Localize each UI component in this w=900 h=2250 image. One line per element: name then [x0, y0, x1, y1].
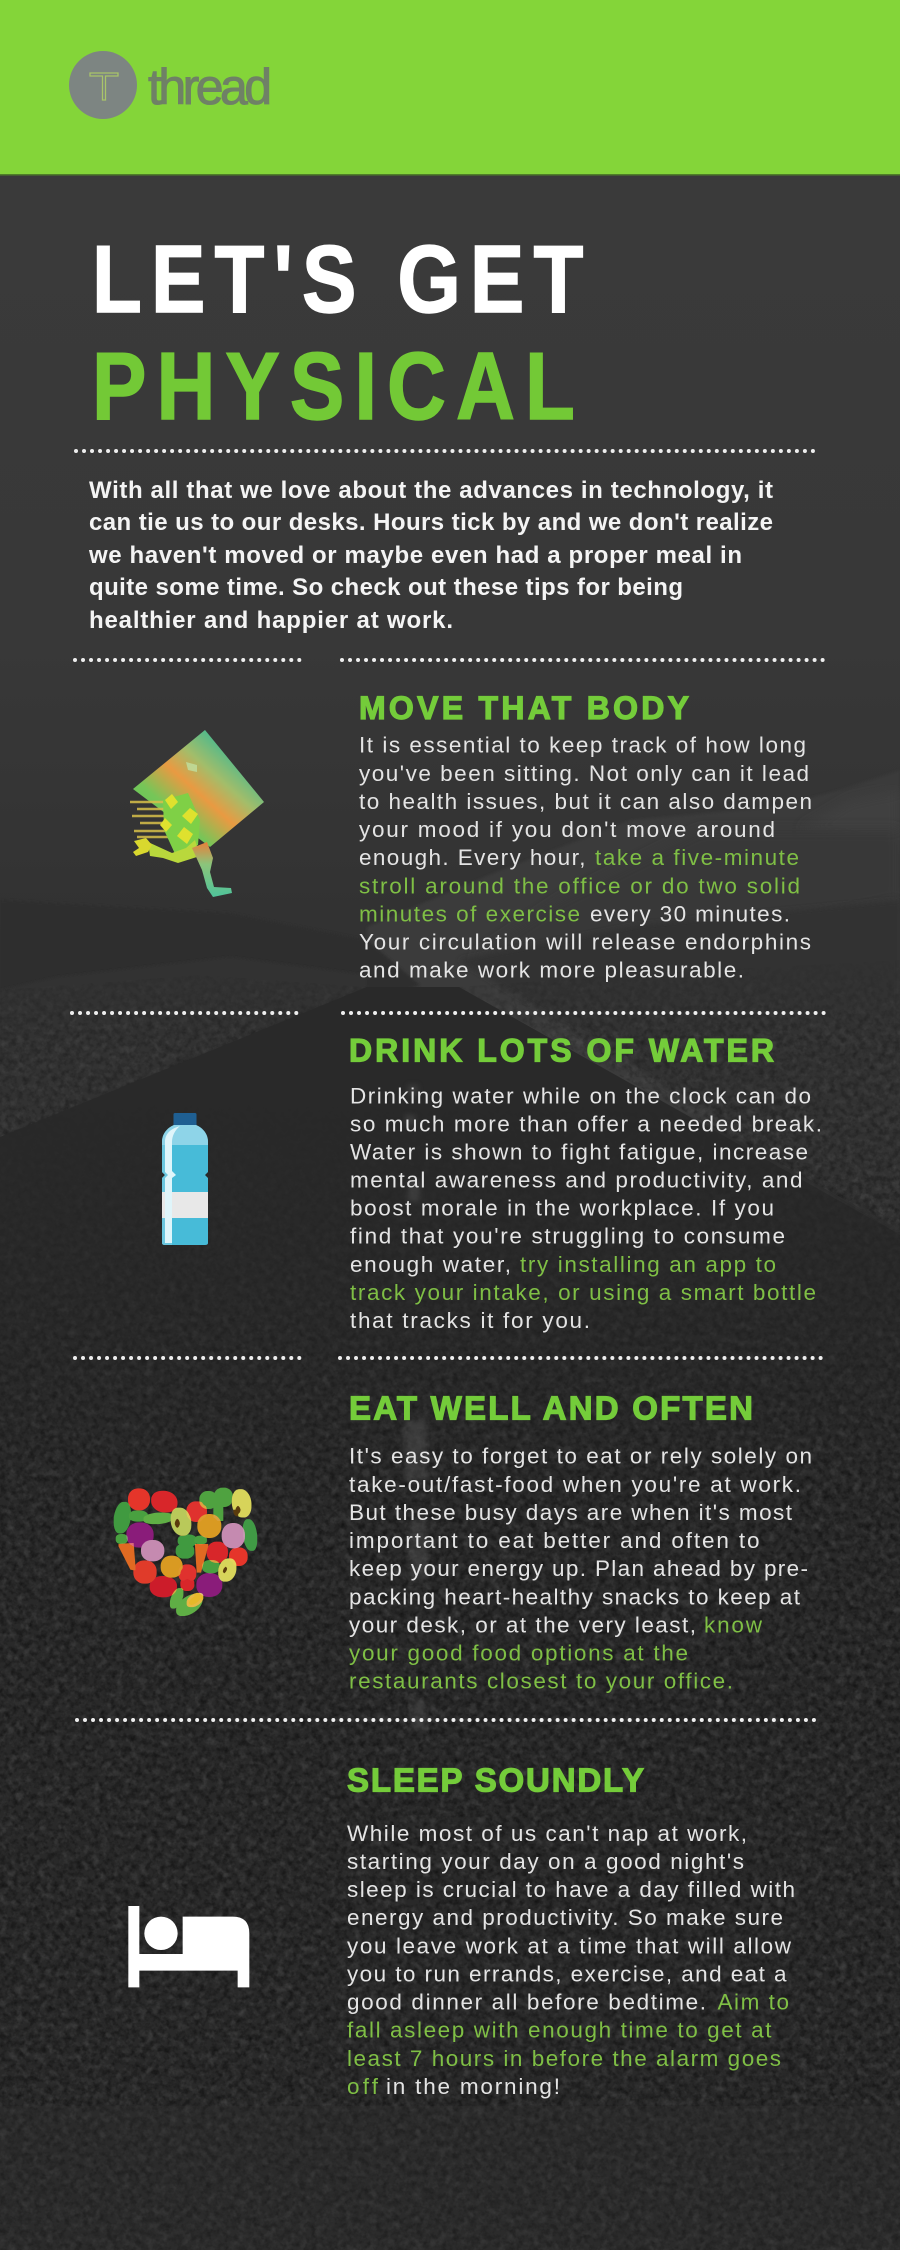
dotted divider	[76, 449, 820, 453]
body text: your desk, or at the very least,	[349, 1612, 696, 1638]
body text: Drinking water while on the clock can do	[350, 1084, 811, 1108]
dotted dividers row 3	[75, 1356, 822, 1360]
body text: your mood if you don't move around	[359, 817, 775, 842]
logo wordmark: thread	[148, 59, 272, 115]
body text: off	[347, 2074, 379, 2099]
dotted dividers row 2	[72, 1011, 825, 1015]
header band	[0, 0, 900, 176]
body text: so much more than offer a needed break.	[350, 1112, 822, 1136]
dotted divider	[77, 1718, 821, 1722]
body text: and make work more pleasurable.	[359, 958, 744, 982]
body text: try installing an app to	[520, 1252, 776, 1277]
heading: DRINK LOTS OF WATER	[349, 1032, 774, 1068]
body text: restaurants closest to your office.	[349, 1668, 733, 1694]
body text: packing heart-healthy snacks to keep at	[349, 1584, 801, 1610]
intro paragraph	[88, 477, 773, 634]
title line 1: LET'S GET	[92, 225, 583, 332]
body text: your good food options at the	[349, 1640, 688, 1666]
body text: fall asleep with enough time to get at	[347, 2018, 772, 2042]
title line 2: PHYSICAL	[92, 332, 575, 439]
body text: mental awareness and productivity, and	[350, 1168, 802, 1192]
body text	[350, 1084, 822, 1333]
body text: enough water,	[350, 1252, 511, 1277]
body text: Water is shown to fight fatigue, increase	[350, 1140, 808, 1164]
body text: It is essential to keep track of how long	[359, 732, 806, 758]
body text: But these busy days are when it's most	[349, 1500, 793, 1525]
section: drink lots of water	[349, 1032, 822, 1333]
body text: energy and productivity. So make sure	[347, 1905, 783, 1930]
body text: It's easy to forget to eat or rely solely on	[349, 1444, 812, 1468]
body text: you leave work at a time that will allow	[347, 1934, 792, 1958]
title	[92, 225, 583, 439]
intro paragraph: quite some time. So check out these tips for being	[89, 574, 683, 601]
body text	[347, 1821, 795, 2099]
body text: stroll around the office or do two solid	[359, 874, 800, 898]
body text: sleep is crucial to have a day filled with	[347, 1877, 795, 1902]
body text: know	[704, 1612, 763, 1638]
body text: keep your energy up. Plan ahead by pre-	[349, 1556, 808, 1581]
body text: track your intake, or using a smart bottle	[350, 1280, 816, 1305]
body text: While most of us can't nap at work,	[347, 1821, 747, 1846]
body text: Aim to	[718, 1990, 789, 2014]
body text: that tracks it for you.	[350, 1308, 590, 1333]
body text: starting your day on a good night's	[347, 1849, 744, 1874]
body text: every 30 minutes.	[590, 902, 790, 926]
body text: take-out/fast-food when you're at work.	[349, 1472, 801, 1497]
icon: runner in gradient diamond	[130, 730, 264, 897]
body text: important to eat better and often to	[349, 1528, 760, 1553]
intro paragraph: healthier and happier at work.	[89, 607, 453, 634]
body text: in the morning!	[386, 2074, 560, 2099]
body text: boost morale in the workplace. If you	[350, 1196, 774, 1220]
icon: bed	[128, 1906, 249, 1987]
body text: take a five-minute	[595, 845, 799, 870]
logo circle with T	[69, 51, 137, 119]
body text: minutes of exercise	[359, 902, 580, 926]
section: sleep soundly	[347, 1762, 795, 2099]
section: move that body	[359, 690, 812, 982]
body text: find that you're struggling to consume	[350, 1224, 785, 1248]
intro paragraph: With all that we love about the advances in technology, it	[89, 477, 773, 504]
body text: Your circulation will release endorphins	[359, 930, 811, 954]
body text	[359, 732, 812, 982]
body text: to health issues, but it can also dampen	[359, 789, 812, 814]
body text: good dinner all before bedtime.	[347, 1990, 706, 2014]
heading: MOVE THAT BODY	[359, 690, 689, 726]
icon: heart of vegetables	[113, 1489, 258, 1619]
body text: enough. Every hour,	[359, 845, 586, 870]
body text: you've been sitting. Not only can it lead	[359, 761, 809, 786]
body text	[349, 1444, 812, 1694]
intro paragraph: we haven't moved or maybe even had a proper meal in	[88, 542, 742, 569]
body text: you to run errands, exercise, and eat a	[347, 1962, 787, 1986]
heading: EAT WELL AND OFTEN	[349, 1390, 753, 1426]
logo: thread	[69, 51, 272, 119]
section: eat well and often	[349, 1390, 812, 1694]
heading: SLEEP SOUNDLY	[347, 1762, 644, 1798]
body text: least 7 hours in before the alarm goes	[347, 2046, 781, 2071]
intro paragraph: can tie us to our desks. Hours tick by and we don't realize	[89, 509, 773, 536]
icon: water bottle	[162, 1113, 208, 1245]
dotted dividers row 1	[75, 658, 824, 662]
